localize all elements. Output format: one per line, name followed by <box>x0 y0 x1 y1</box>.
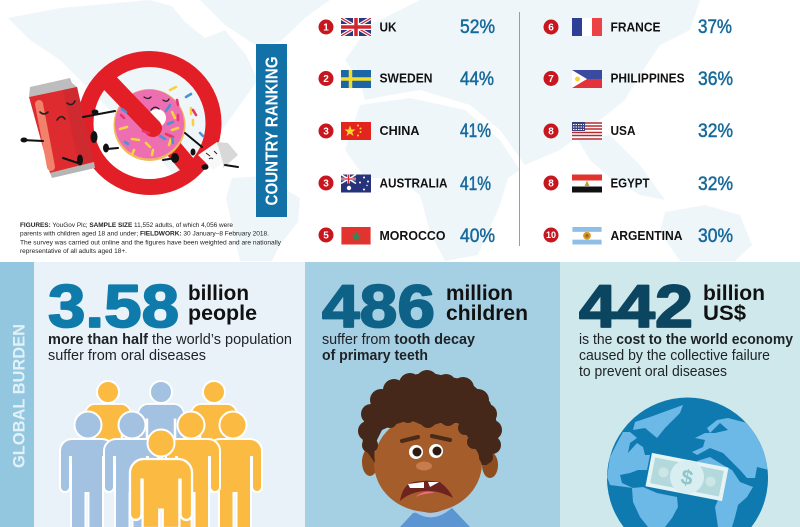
row: France <box>544 16 732 38</box>
global burden side label <box>0 262 34 527</box>
divider <box>519 12 520 246</box>
row: USA: 8 <box>548 126 554 138</box>
row: USA <box>544 120 733 142</box>
row: Egypt: 8 <box>548 178 554 190</box>
panel: people <box>34 262 305 527</box>
icon: soda can <box>20 78 118 178</box>
global burden side label: GLOBAL BURDEN <box>10 324 28 468</box>
stat: 3.58 billion people: 3.58 <box>48 273 179 340</box>
stat: 486 million children <box>322 273 528 340</box>
row: Australia: AUSTRALIA <box>380 176 448 190</box>
row: Australia: 41% <box>460 173 491 195</box>
world map background <box>8 0 752 261</box>
stat: 442 billion US$: 442 <box>579 273 693 340</box>
country ranking label <box>256 44 287 217</box>
row: Morocco <box>318 225 495 247</box>
icon: sugar cube <box>198 142 238 170</box>
footnote: The survey was carried out online and the figures have been weighted and are nationally <box>20 240 282 246</box>
no-sugar illustration <box>20 59 238 187</box>
description <box>579 332 793 380</box>
description: more than half the world’s population <box>48 332 292 348</box>
stat: 3.58 billion people <box>48 273 257 340</box>
row: Argentina: ARGENTINA <box>610 229 682 243</box>
row: UK: 1 <box>323 22 329 34</box>
row: USA: 32% <box>698 120 733 142</box>
row: Argentina: 30% <box>698 225 733 247</box>
illustration: globe with banknote <box>607 398 769 527</box>
description: of primary teeth <box>322 348 428 364</box>
prohibition sign ring <box>86 59 214 187</box>
row: Philippines <box>544 68 733 90</box>
description: suffer from tooth decay <box>322 332 475 348</box>
country ranking label: COUNTRY RANKING <box>262 56 282 206</box>
description: is the cost to the world economy <box>579 332 793 348</box>
description: suffer from oral diseases <box>48 348 206 364</box>
description <box>322 332 475 364</box>
description: caused by the collective failure <box>579 348 770 364</box>
footnote: FIGURES: YouGov Plc; SAMPLE SIZE 11,552 adults, of which 4,056 were <box>20 222 233 229</box>
top section background <box>0 0 800 262</box>
row: Egypt <box>544 173 733 195</box>
row: Philippines: 36% <box>698 68 733 90</box>
row: France: FRANCE <box>610 20 660 34</box>
row: Sweden <box>318 68 494 90</box>
row: China <box>318 120 491 142</box>
panel: children <box>305 262 560 527</box>
row: China: 3 <box>323 126 329 138</box>
panel: economy <box>560 262 800 527</box>
icon: banknote: $ <box>679 466 695 490</box>
description: to prevent oral diseases <box>579 364 727 380</box>
row: Philippines: 7 <box>548 74 554 85</box>
ranking left column <box>318 16 495 247</box>
row: Morocco: 40% <box>460 225 495 247</box>
row: UK <box>318 16 495 38</box>
row: China: CHINA <box>380 124 420 138</box>
row: Egypt: 32% <box>698 173 733 195</box>
stat: 442 billion US$: billion <box>703 282 765 305</box>
row: Morocco: 5 <box>323 230 329 242</box>
row: Argentina <box>544 225 733 247</box>
icon: crowd of people <box>60 381 262 527</box>
row: Morocco: MOROCCO <box>380 229 446 243</box>
row: Egypt: EGYPT <box>610 176 650 190</box>
row: France: 6 <box>548 22 554 34</box>
row: Sweden: 44% <box>460 68 494 90</box>
stat: 486 million children: children <box>446 302 528 325</box>
stat: 3.58 billion people: people <box>188 302 257 325</box>
icon: banknote <box>645 453 729 501</box>
row: UK: UK <box>380 20 396 34</box>
row: France: 37% <box>698 16 732 38</box>
stat: 486 million children: million <box>446 282 513 305</box>
footnote: parents with children aged 18 and under; FIELDWORK: 30 January–8 February 2018. <box>20 230 269 238</box>
illustration: boy with missing teeth <box>358 370 502 527</box>
stat: 486 million children: 486 <box>322 273 435 340</box>
stat: 442 billion US$ <box>579 273 765 340</box>
row: Sweden: 2 <box>323 74 329 85</box>
stat: 442 billion US$: US$ <box>703 302 746 325</box>
ranking right column <box>544 16 733 247</box>
row: USA: USA <box>610 124 636 138</box>
stat: 3.58 billion people: billion <box>188 282 249 305</box>
footnote <box>20 222 282 255</box>
row: Australia: 3 <box>323 178 329 190</box>
footnote: representative of all adults aged 18+. <box>20 248 127 255</box>
row: China: 41% <box>460 120 491 142</box>
row: UK: 52% <box>460 16 495 38</box>
row: Sweden: SWEDEN <box>380 72 432 86</box>
row: Philippines: PHILIPPINES <box>610 72 684 86</box>
row: Argentina: 10 <box>546 230 556 240</box>
icon: pink donut <box>108 81 203 163</box>
row: Australia <box>318 173 491 195</box>
description <box>48 332 292 364</box>
